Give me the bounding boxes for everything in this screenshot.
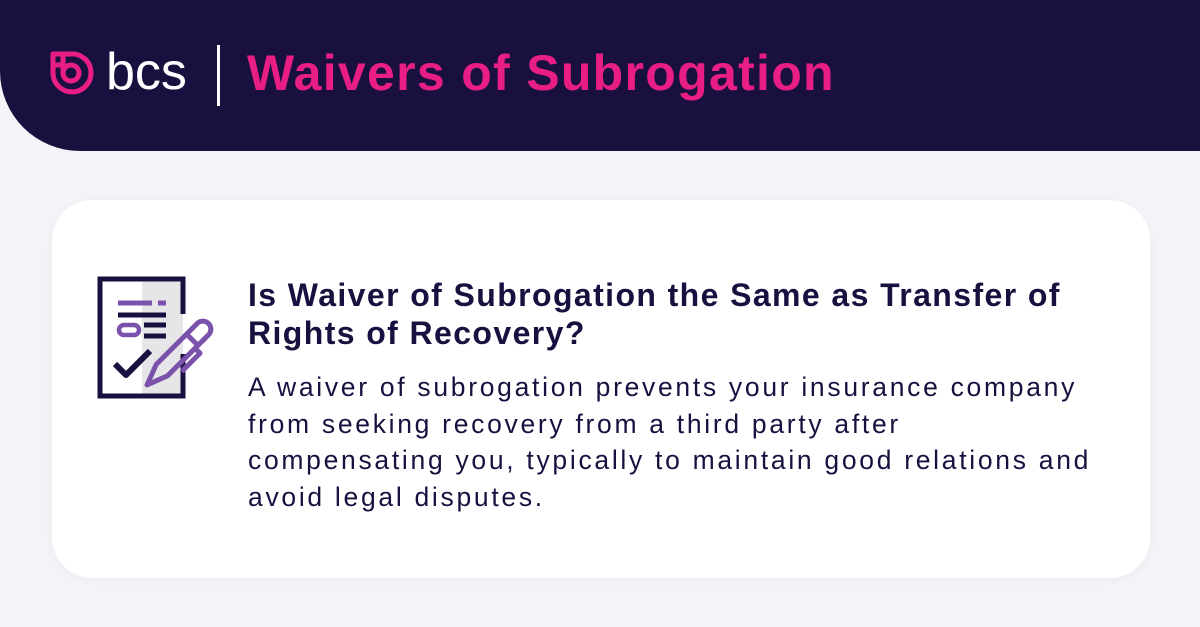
icon: document with pen: [98, 276, 214, 398]
body text: compensating you, typically to maintain good relations and: [248, 445, 1091, 475]
body text: A waiver of subrogation prevents your insurance company: [248, 372, 1077, 402]
divider: [217, 45, 220, 106]
panel: content card: [52, 200, 1150, 578]
title: Waivers of Subrogation: [247, 45, 835, 101]
heading: Is Waiver of Subrogation the Same as Transfer of Rights of Recovery?: [248, 277, 1061, 351]
logo text: bcs: [106, 43, 187, 101]
body text: from seeking recovery from a third party after: [248, 408, 901, 438]
logo: [50, 43, 187, 101]
header band: [0, 0, 1200, 151]
icon: bcs mark: [50, 51, 94, 94]
body text: avoid legal disputes.: [248, 482, 545, 512]
body text: [248, 372, 1091, 512]
